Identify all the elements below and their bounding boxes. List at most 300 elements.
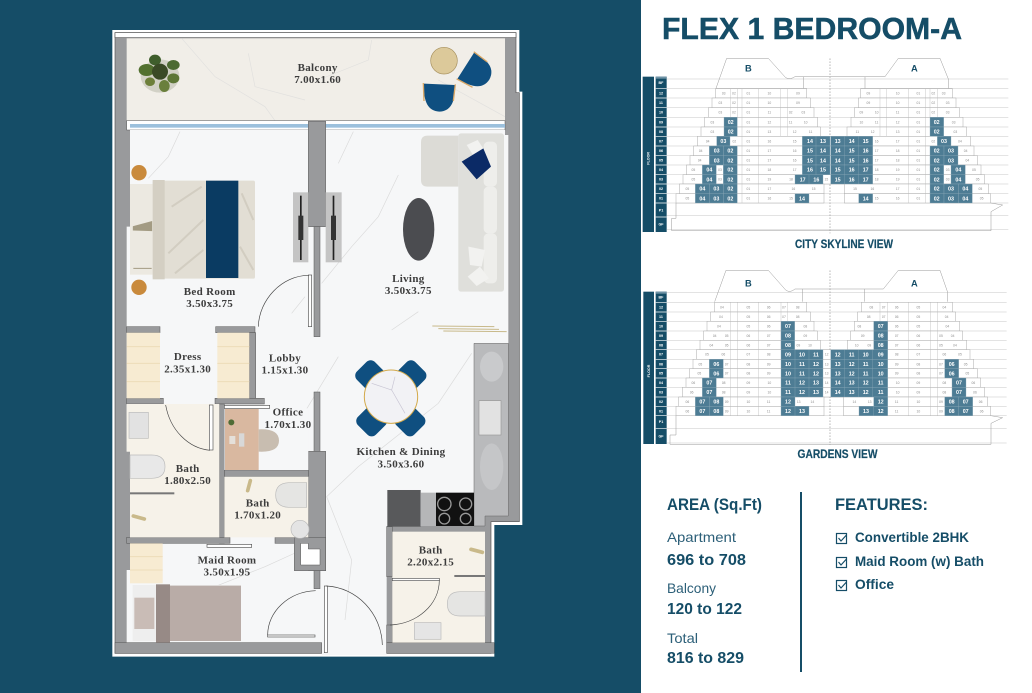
unit numbers: 02	[789, 111, 793, 115]
chart title: city skyline view: CITY SKYLINE VIEW	[795, 239, 893, 251]
unit numbers: 05	[980, 197, 984, 201]
unit numbers: 11	[895, 400, 899, 404]
unit numbers: 08	[878, 334, 884, 340]
unit numbers: 07	[699, 400, 705, 406]
unit numbers: 03	[946, 101, 950, 105]
unit numbers: 18	[875, 168, 879, 172]
shaft	[301, 543, 320, 565]
unit numbers: 13	[849, 381, 855, 387]
feature: convertible 2BHK: Convertible 2BHK	[855, 530, 969, 545]
unit numbers: 07	[882, 315, 886, 319]
unit numbers: 02	[931, 101, 935, 105]
unit numbers: 01	[916, 120, 920, 124]
unit numbers: 07	[895, 334, 899, 338]
unit numbers: 06	[685, 400, 689, 404]
unit numbers: 11	[856, 130, 859, 134]
unit numbers: 14	[849, 139, 855, 145]
wall mass	[115, 33, 519, 653]
unit numbers: 06	[767, 315, 771, 319]
unit numbers: 06	[767, 305, 771, 309]
unit numbers: 15	[820, 168, 826, 174]
unit numbers: 02	[728, 120, 734, 126]
unit numbers: 17	[793, 168, 797, 172]
unit numbers: 05	[976, 178, 980, 182]
unit numbers: 15	[789, 197, 793, 201]
unit numbers: 08	[713, 409, 719, 415]
unit numbers: 13	[835, 371, 841, 377]
unit numbers: 13	[835, 139, 841, 145]
unit numbers: 10	[785, 362, 791, 368]
unit numbers: 08	[785, 343, 791, 349]
unit numbers: 02	[934, 149, 940, 155]
unit numbers: 07	[963, 400, 969, 406]
unit numbers: 05	[691, 178, 695, 182]
unit numbers: 14	[799, 196, 805, 202]
unit numbers: 01	[916, 149, 920, 153]
floor bar	[643, 77, 654, 232]
unit numbers: 05	[939, 343, 943, 347]
unit numbers: 15	[824, 178, 828, 182]
unit numbers: 02	[934, 168, 940, 174]
unit numbers	[685, 92, 984, 202]
unit numbers: 15	[793, 139, 797, 143]
unit numbers: 13	[835, 362, 841, 368]
unit numbers: 04	[962, 187, 968, 193]
unit numbers: 11	[813, 352, 819, 358]
unit numbers: 16	[767, 139, 771, 143]
unit numbers: 06	[980, 409, 984, 413]
unit numbers: 08	[916, 362, 920, 366]
walls	[115, 121, 494, 653]
room labels: 3.50x3.75	[186, 298, 233, 310]
unit numbers: 03	[713, 187, 719, 193]
unit numbers: 05	[746, 324, 750, 328]
unit numbers: 09	[878, 352, 884, 358]
unit numbers: 09	[725, 409, 729, 413]
unit numbers: 04	[706, 177, 712, 183]
floor lines	[667, 79, 1008, 230]
unit numbers: 09	[796, 343, 800, 347]
unit numbers: 01	[916, 168, 920, 172]
sofa	[421, 133, 504, 292]
unit numbers: 07	[699, 409, 705, 415]
total area: 816 to 829	[667, 650, 744, 667]
unit numbers: 12	[813, 371, 819, 377]
unit numbers: 03	[946, 168, 950, 172]
unit numbers: 09	[767, 362, 771, 366]
unit numbers: 12	[799, 390, 805, 396]
unit numbers: 15	[835, 177, 841, 183]
unit numbers: 01	[916, 159, 920, 163]
total area	[667, 630, 744, 667]
unit numbers: 01	[746, 168, 750, 172]
unit numbers: 11	[785, 390, 791, 396]
unit numbers: 04	[717, 324, 721, 328]
unit numbers: 10	[896, 101, 900, 105]
unit numbers: 11	[767, 400, 771, 404]
plant	[139, 55, 180, 93]
unit numbers: 01	[746, 178, 750, 182]
unit numbers: 05	[746, 305, 750, 309]
background: white info panel	[641, 0, 1032, 693]
unit numbers: 10	[916, 400, 920, 404]
doors	[166, 275, 439, 653]
glazing strip	[127, 121, 505, 130]
floor number column: 07	[659, 139, 663, 143]
unit numbers: 12	[849, 371, 855, 377]
unit numbers: 02	[931, 139, 935, 143]
unit numbers: 02	[727, 187, 733, 193]
unit numbers: 12	[767, 120, 771, 124]
floor number column: 05	[659, 372, 663, 376]
floor number column: 12	[659, 92, 663, 96]
unit numbers: 14	[835, 158, 841, 164]
unit numbers: 15	[863, 139, 869, 145]
unit numbers: 05	[725, 334, 729, 338]
room labels: 1.70x1.20	[234, 509, 281, 521]
unit numbers: 07	[956, 381, 962, 387]
floor number column: 06	[659, 149, 663, 153]
room labels: Lobby	[269, 352, 301, 364]
unit numbers: 07	[785, 324, 791, 330]
unit numbers: 01	[916, 92, 920, 96]
unit numbers: 03	[718, 111, 722, 115]
unit numbers: 13	[863, 409, 869, 415]
unit numbers: 03	[718, 101, 722, 105]
building outline	[672, 58, 1003, 231]
divider	[800, 492, 802, 672]
unit numbers: 01	[916, 130, 920, 134]
floor number column: 04	[659, 381, 664, 385]
unit numbers: 05	[685, 187, 689, 191]
feature: maid room with bath: Maid Room (w) Bath	[855, 554, 984, 569]
title: FLEX 1 BEDROOM-A	[662, 11, 962, 46]
unit numbers: 02	[727, 196, 733, 202]
unit numbers: 11	[878, 381, 884, 387]
unit numbers: 09	[939, 400, 943, 404]
unit numbers: 10	[808, 343, 812, 347]
unit numbers: 13	[767, 130, 771, 134]
balcony floor	[127, 38, 505, 121]
unit numbers: 17	[896, 139, 900, 143]
unit numbers: 07	[746, 353, 750, 357]
unit numbers: 10	[799, 352, 805, 358]
wall lamps	[293, 192, 342, 262]
unit numbers: 03	[946, 111, 950, 115]
unit numbers: 12	[813, 362, 819, 368]
unit numbers: 07	[956, 390, 962, 396]
unit numbers: 02	[727, 168, 733, 174]
unit numbers: 07	[782, 315, 786, 319]
unit numbers: 02	[732, 101, 736, 105]
unit outlines	[676, 89, 991, 203]
unit numbers: 05	[965, 372, 969, 376]
room labels: 1.70x1.30	[265, 419, 312, 431]
unit numbers: 10	[767, 381, 771, 385]
unit numbers: 15	[849, 158, 855, 164]
unit numbers: 04	[965, 159, 969, 163]
chart title: gardens view: GARDENS VIEW	[798, 449, 878, 461]
unit numbers: 16	[807, 168, 813, 174]
unit numbers: 05	[916, 315, 920, 319]
unit numbers: 06	[690, 390, 694, 394]
unit numbers: 16	[793, 159, 797, 163]
unit numbers: 01	[746, 101, 750, 105]
unit numbers: 01	[916, 111, 920, 115]
unit numbers: 02	[934, 196, 940, 202]
unit numbers: 08	[746, 362, 750, 366]
floor number column: P1	[659, 208, 663, 212]
unit numbers: 06	[949, 362, 955, 368]
building outline	[670, 270, 1003, 444]
floor number column: 07	[659, 353, 663, 357]
unit numbers: 04	[962, 196, 968, 202]
unit numbers: 03	[720, 139, 726, 145]
unit numbers: 03	[710, 120, 714, 124]
unit numbers: 02	[732, 92, 736, 96]
room: office	[224, 405, 308, 470]
unit numbers: 19	[767, 178, 771, 182]
unit numbers: 03	[714, 149, 720, 155]
bed	[130, 180, 255, 279]
unit numbers: 01	[746, 92, 750, 96]
unit numbers: 08	[785, 334, 791, 340]
unit numbers: 11	[895, 409, 899, 413]
room labels: Maid Room	[198, 554, 256, 566]
unit numbers: 10	[878, 371, 884, 377]
unit numbers: 06	[746, 334, 750, 338]
tower labels: A	[911, 64, 918, 74]
floor number column	[656, 77, 667, 232]
background: dark teal panel	[0, 0, 641, 693]
unit numbers: 03	[946, 178, 950, 182]
room labels: 3.50x3.60	[378, 458, 425, 470]
room labels: 3.50x1.95	[204, 567, 251, 579]
unit numbers: 01	[916, 178, 920, 182]
floor number column: 08	[659, 130, 663, 134]
unit numbers: 12	[825, 353, 829, 357]
curtain rail	[432, 326, 507, 332]
unit numbers: 10	[863, 352, 869, 358]
unit numbers: 01	[916, 139, 920, 143]
unit numbers: 18	[767, 168, 771, 172]
unit numbers: 15	[807, 158, 813, 164]
unit numbers: 13	[797, 400, 801, 404]
unit numbers: 07	[895, 343, 899, 347]
unit numbers: 09	[725, 400, 729, 404]
unit numbers: 09	[803, 334, 807, 338]
balustrade	[115, 33, 516, 38]
main marble floor	[127, 130, 508, 655]
unit numbers: 09	[746, 390, 750, 394]
unit numbers: 13	[820, 139, 826, 145]
unit numbers: 14	[825, 390, 829, 394]
unit numbers: 13	[849, 390, 855, 396]
unit numbers: 09	[767, 372, 771, 376]
unit numbers: 11	[896, 111, 900, 115]
floor bar: FLOOR	[647, 364, 651, 377]
unit numbers: 02	[934, 177, 940, 183]
unit numbers: 08	[949, 400, 955, 406]
unit numbers: 06	[746, 343, 750, 347]
unit numbers: 16	[767, 197, 771, 201]
unit numbers: 02	[934, 187, 940, 193]
unit numbers: 06	[713, 362, 719, 368]
unit numbers: 11	[767, 409, 771, 413]
unit numbers: 04	[951, 334, 955, 338]
unit numbers: 08	[722, 390, 726, 394]
chart: gardens view	[643, 270, 1007, 445]
unit numbers: 17	[767, 159, 771, 163]
unit numbers: 03	[710, 130, 714, 134]
unit numbers: 04	[955, 177, 961, 183]
unit numbers: 08	[722, 381, 726, 385]
unit numbers: 03	[942, 92, 946, 96]
unit numbers: 17	[896, 187, 900, 191]
unit numbers: 16	[863, 149, 869, 155]
unit numbers: 08	[713, 400, 719, 406]
unit numbers: 10	[804, 120, 808, 124]
unit numbers: 16	[875, 139, 879, 143]
floor number column: 11	[659, 101, 663, 105]
room labels: Bath	[246, 497, 270, 509]
unit numbers: 05	[746, 315, 750, 319]
unit numbers: 01	[916, 187, 920, 191]
unit numbers: 04	[955, 168, 961, 174]
room labels: 1.15x1.30	[262, 364, 309, 376]
balcony area	[667, 580, 742, 618]
unit numbers: 15	[812, 187, 816, 191]
unit numbers: 11	[789, 120, 793, 124]
floor bar	[643, 292, 654, 444]
unit numbers: 02	[934, 158, 940, 164]
floor number column: 01	[659, 409, 663, 413]
unit numbers: 11	[809, 130, 813, 134]
unit numbers: 07	[916, 353, 920, 357]
unit numbers: 01	[746, 197, 750, 201]
unit numbers: 16	[793, 149, 797, 153]
room labels: Kitchen & Dining	[357, 446, 446, 458]
tower labels: B	[745, 64, 752, 74]
floor number column: 09	[659, 334, 663, 338]
unit numbers: 01	[746, 187, 750, 191]
unit numbers: 09	[796, 92, 800, 96]
unit numbers: 14	[820, 149, 826, 155]
unit numbers: 12	[863, 381, 869, 387]
unit numbers: 03	[713, 196, 719, 202]
unit numbers: 08	[878, 343, 884, 349]
floor bar: FLOOR	[647, 152, 651, 165]
unit numbers: 07	[939, 372, 943, 376]
unit outlines	[676, 302, 991, 416]
unit numbers: 03	[718, 168, 722, 172]
unit numbers: 05	[958, 353, 962, 357]
unit numbers: 04	[945, 315, 949, 319]
unit numbers: 09	[895, 362, 899, 366]
unit numbers: 18	[789, 178, 793, 182]
unit numbers: 12	[849, 362, 855, 368]
unit numbers: 12	[785, 409, 791, 415]
unit numbers: 02	[727, 158, 733, 164]
unit numbers: 09	[916, 381, 920, 385]
unit numbers: 10	[875, 111, 879, 115]
unit numbers: 06	[916, 343, 920, 347]
unit numbers: 11	[849, 352, 855, 358]
unit numbers: 17	[800, 177, 806, 183]
floor number column: 03	[659, 390, 663, 394]
unit numbers: 02	[732, 111, 736, 115]
unit numbers: 10	[767, 390, 771, 394]
floor number column: 02	[659, 400, 663, 404]
apartment area	[667, 529, 746, 569]
unit numbers: 13	[868, 400, 872, 404]
unit numbers: 03	[801, 111, 805, 115]
unit numbers: 04	[698, 159, 702, 163]
unit numbers: 07	[706, 381, 712, 387]
unit numbers: 10	[746, 409, 750, 413]
unit numbers: 06	[979, 400, 983, 404]
unit numbers: 15	[849, 149, 855, 155]
unit numbers: 12	[835, 352, 841, 358]
unit numbers: 08	[796, 315, 800, 319]
unit numbers: 16	[849, 168, 855, 174]
centre line	[829, 58, 831, 233]
unit numbers: 04	[706, 168, 712, 174]
floor number column: 04	[659, 168, 664, 172]
unit numbers: 04	[720, 305, 724, 309]
floor number column: 01	[659, 197, 663, 201]
bedside tables	[131, 165, 147, 295]
unit numbers: 05	[939, 334, 943, 338]
unit numbers: 05	[972, 168, 976, 172]
unit numbers: 02	[931, 111, 935, 115]
unit numbers: 04	[719, 315, 723, 319]
unit numbers: 18	[875, 178, 879, 182]
unit numbers: 10	[896, 390, 900, 394]
floor number column: P1	[659, 420, 663, 424]
unit numbers: 01	[746, 159, 750, 163]
unit numbers: 01	[746, 149, 750, 153]
unit numbers: 09	[867, 343, 871, 347]
unit numbers: 12	[896, 120, 900, 124]
unit numbers: 13	[896, 130, 900, 134]
unit numbers: 04	[709, 343, 713, 347]
room labels: 3.50x3.75	[385, 285, 432, 297]
unit numbers: 06	[895, 324, 899, 328]
unit numbers: 04	[699, 149, 703, 153]
unit numbers: 19	[896, 168, 900, 172]
unit numbers: 08	[867, 315, 871, 319]
unit numbers: 05	[916, 324, 920, 328]
room labels: 7.00x1.60	[294, 74, 341, 86]
unit numbers: 10	[785, 371, 791, 377]
floor number column: BF	[659, 296, 664, 300]
floor lines	[667, 292, 1007, 443]
unit numbers: 01	[916, 197, 920, 201]
unit numbers: 12	[878, 409, 884, 415]
unit numbers: 05	[978, 187, 982, 191]
unit numbers: 11	[875, 120, 879, 124]
unit numbers: 03	[948, 196, 954, 202]
unit numbers: 07	[782, 305, 786, 309]
unit numbers: 08	[746, 372, 750, 376]
unit numbers: 10	[916, 409, 920, 413]
room labels: 2.20x2.15	[407, 557, 454, 569]
floor number column: 11	[659, 315, 663, 319]
unit numbers: 15	[875, 197, 879, 201]
unit numbers: 12	[878, 400, 884, 406]
unit numbers: 03	[722, 92, 726, 96]
